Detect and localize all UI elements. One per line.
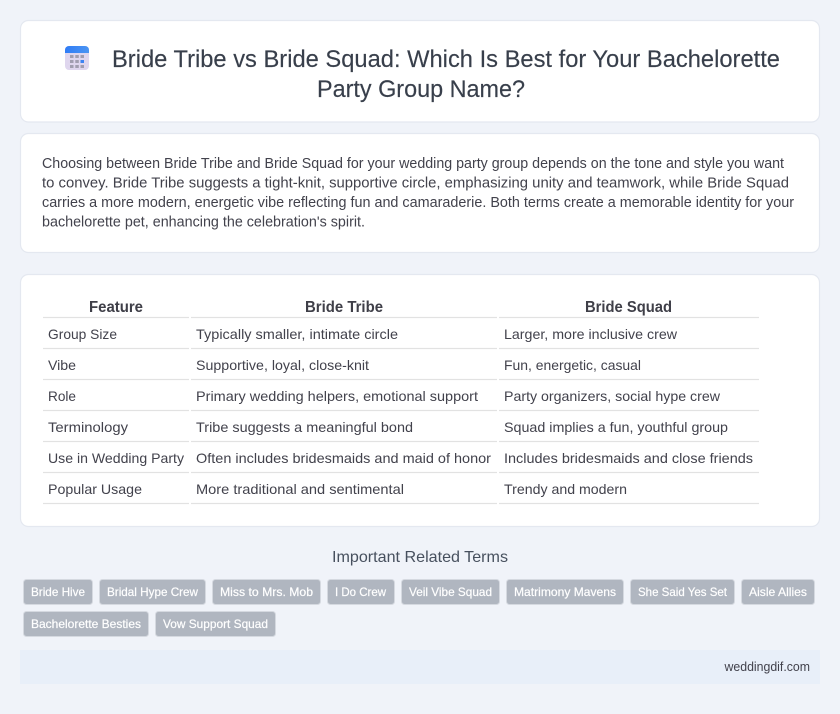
title [112,46,780,103]
row: terminology: Squad implies a fun, youthful group [504,419,728,435]
tag: Bridal Hype Crew [100,580,206,604]
intro paragraph: Choosing between Bride Tribe and Bride Squad for your wedding party group depends on the tone and style you want [42,156,784,172]
panel: header [20,20,820,122]
table header row: Bride Squad [585,299,672,316]
row: group size [48,326,678,342]
row: terminology: Terminology [48,419,128,435]
row: group size: Typically smaller, intimate circle [196,326,398,342]
row: role: Party organizers, social hype crew [504,388,721,404]
row: role: Role [48,388,76,404]
row: popular usage [48,481,627,497]
tag: She Said Yes Set [630,580,734,604]
row: group size: Group Size [48,326,117,342]
tag: Miss to Mrs. Mob: Miss to Mrs. Mob [220,585,313,599]
tag: Bridal Hype Crew: Bridal Hype Crew [107,585,198,599]
tag: Aisle Allies: Aisle Allies [749,585,807,599]
tag: Bachelorette Besties: Bachelorette Besties [31,617,141,631]
panel: comparison table [20,274,820,526]
tag: I Do Crew: I Do Crew [335,585,386,599]
tag: Vow Support Squad: Vow Support Squad [163,617,268,631]
tag: Matrimony Mavens [506,580,624,604]
tag: Aisle Allies [742,580,814,604]
title: Bride Tribe vs Bride Squad: Which Is Best for Your Bachelorette [112,46,780,73]
row: use in wedding party [48,450,753,466]
row: group size: Larger, more inclusive crew [504,326,678,342]
row: terminology: Tribe suggests a meaningful bond [196,419,413,435]
tag: Bride Hive [24,580,92,604]
row: role: Primary wedding helpers, emotional support [196,388,478,404]
tag: Bachelorette Besties [24,612,148,636]
table header row: Feature [89,299,143,316]
row: use in wedding party: Often includes bridesmaids and maid of honor [196,450,491,466]
table header row [89,299,672,316]
row: role [48,388,721,404]
row: terminology [48,419,728,435]
footer source text: weddingdif.com [724,660,810,674]
row: vibe: Fun, energetic, casual [504,357,641,373]
footer bar [20,650,820,684]
tag: Vow Support Squad [156,612,276,636]
panel: introduction [20,134,820,252]
table header row: Bride Tribe [305,299,383,316]
intro paragraph: to convey. Bride Tribe suggests a tight-knit, supportive circle, emphasizing unity and teamwork, while Bride Squad [42,176,789,192]
intro paragraph: bachelorette pet, enhancing the celebration's spirit. [42,214,365,230]
row: vibe: Vibe [48,357,76,373]
row: popular usage: Trendy and modern [504,481,627,497]
related term tags [24,580,814,636]
tag: Veil Vibe Squad [402,580,500,604]
tag: Veil Vibe Squad: Veil Vibe Squad [409,585,492,599]
row: vibe [48,357,641,373]
row: use in wedding party: Use in Wedding Party [48,450,184,466]
tag: Miss to Mrs. Mob [212,580,320,604]
row: popular usage: Popular Usage [48,481,142,497]
heading: important related terms: Important Related Terms [332,549,508,566]
tag: Bride Hive: Bride Hive [31,585,85,599]
intro paragraph [42,156,794,230]
row: vibe: Supportive, loyal, close-knit [196,357,369,373]
row: popular usage: More traditional and sentimental [196,481,404,497]
icon: calendar [65,46,89,70]
tag: Matrimony Mavens: Matrimony Mavens [514,585,616,599]
intro paragraph: carries a more modern, energetic vibe reflecting fun and camaraderie. Both terms create a memorable identity for your [42,195,794,211]
title: Party Group Name? [317,76,525,103]
tag: I Do Crew [328,580,394,604]
row: use in wedding party: Includes bridesmaids and close friends [504,450,753,466]
tag: She Said Yes Set: She Said Yes Set [638,585,728,599]
